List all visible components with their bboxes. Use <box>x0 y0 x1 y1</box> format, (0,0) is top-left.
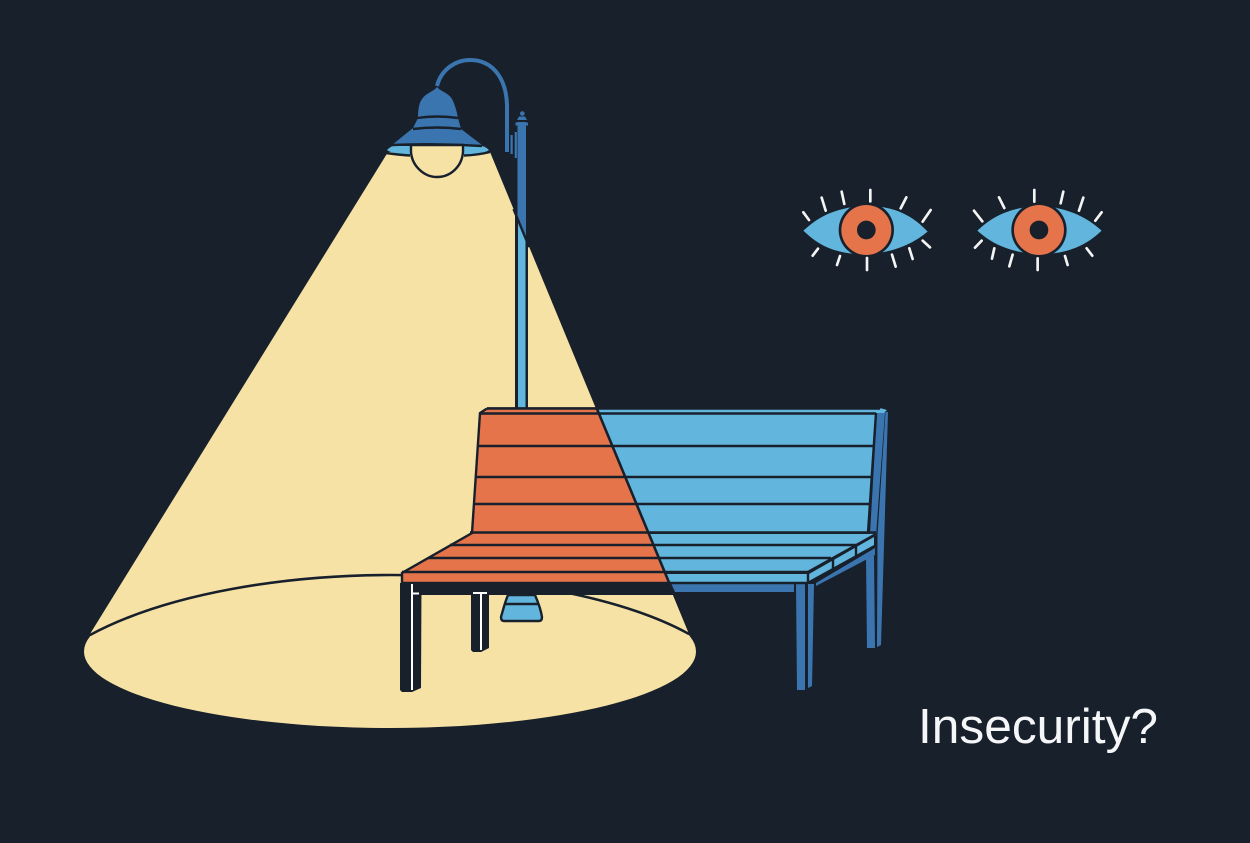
backrest slats <box>472 414 875 532</box>
light cone and pool of light <box>84 152 696 728</box>
seat side edge <box>809 537 874 581</box>
backrest outer strip <box>877 412 888 647</box>
illustration: street lamp, bench and watching eyes <box>84 58 1156 753</box>
caption: Insecurity? <box>918 700 1158 754</box>
seat slats <box>402 534 875 572</box>
right eye <box>974 190 1102 270</box>
backrest top edge <box>480 408 887 413</box>
backrest right frame <box>870 412 885 536</box>
seat front edge <box>402 574 807 582</box>
lamp head <box>386 87 490 177</box>
left eye lashes <box>803 190 931 270</box>
lamp bulb <box>411 145 463 177</box>
left eye <box>803 190 931 270</box>
under-seat rail <box>671 583 794 592</box>
bench: unlit part <box>402 408 888 690</box>
lit backrest top edge <box>483 409 597 412</box>
lit seat <box>402 533 690 582</box>
left back leg <box>471 592 489 652</box>
lamp post base <box>501 595 542 621</box>
right front leg <box>796 584 805 690</box>
lit section of post <box>515 216 528 408</box>
lamp post <box>510 111 529 412</box>
left front leg <box>400 595 422 692</box>
side rail <box>816 548 875 586</box>
lit backrest <box>473 414 646 532</box>
shadow edge of the light on the bench <box>597 409 673 592</box>
watching eyes <box>803 190 1102 270</box>
under-seat shadow beam <box>421 584 673 595</box>
right back leg <box>866 556 875 648</box>
leg highlights <box>412 584 487 690</box>
right eye lashes <box>974 190 1102 270</box>
lit slat lines <box>402 408 690 583</box>
bench: lit part <box>400 408 690 692</box>
lamp arm <box>437 60 507 152</box>
bench outlines <box>402 408 880 583</box>
